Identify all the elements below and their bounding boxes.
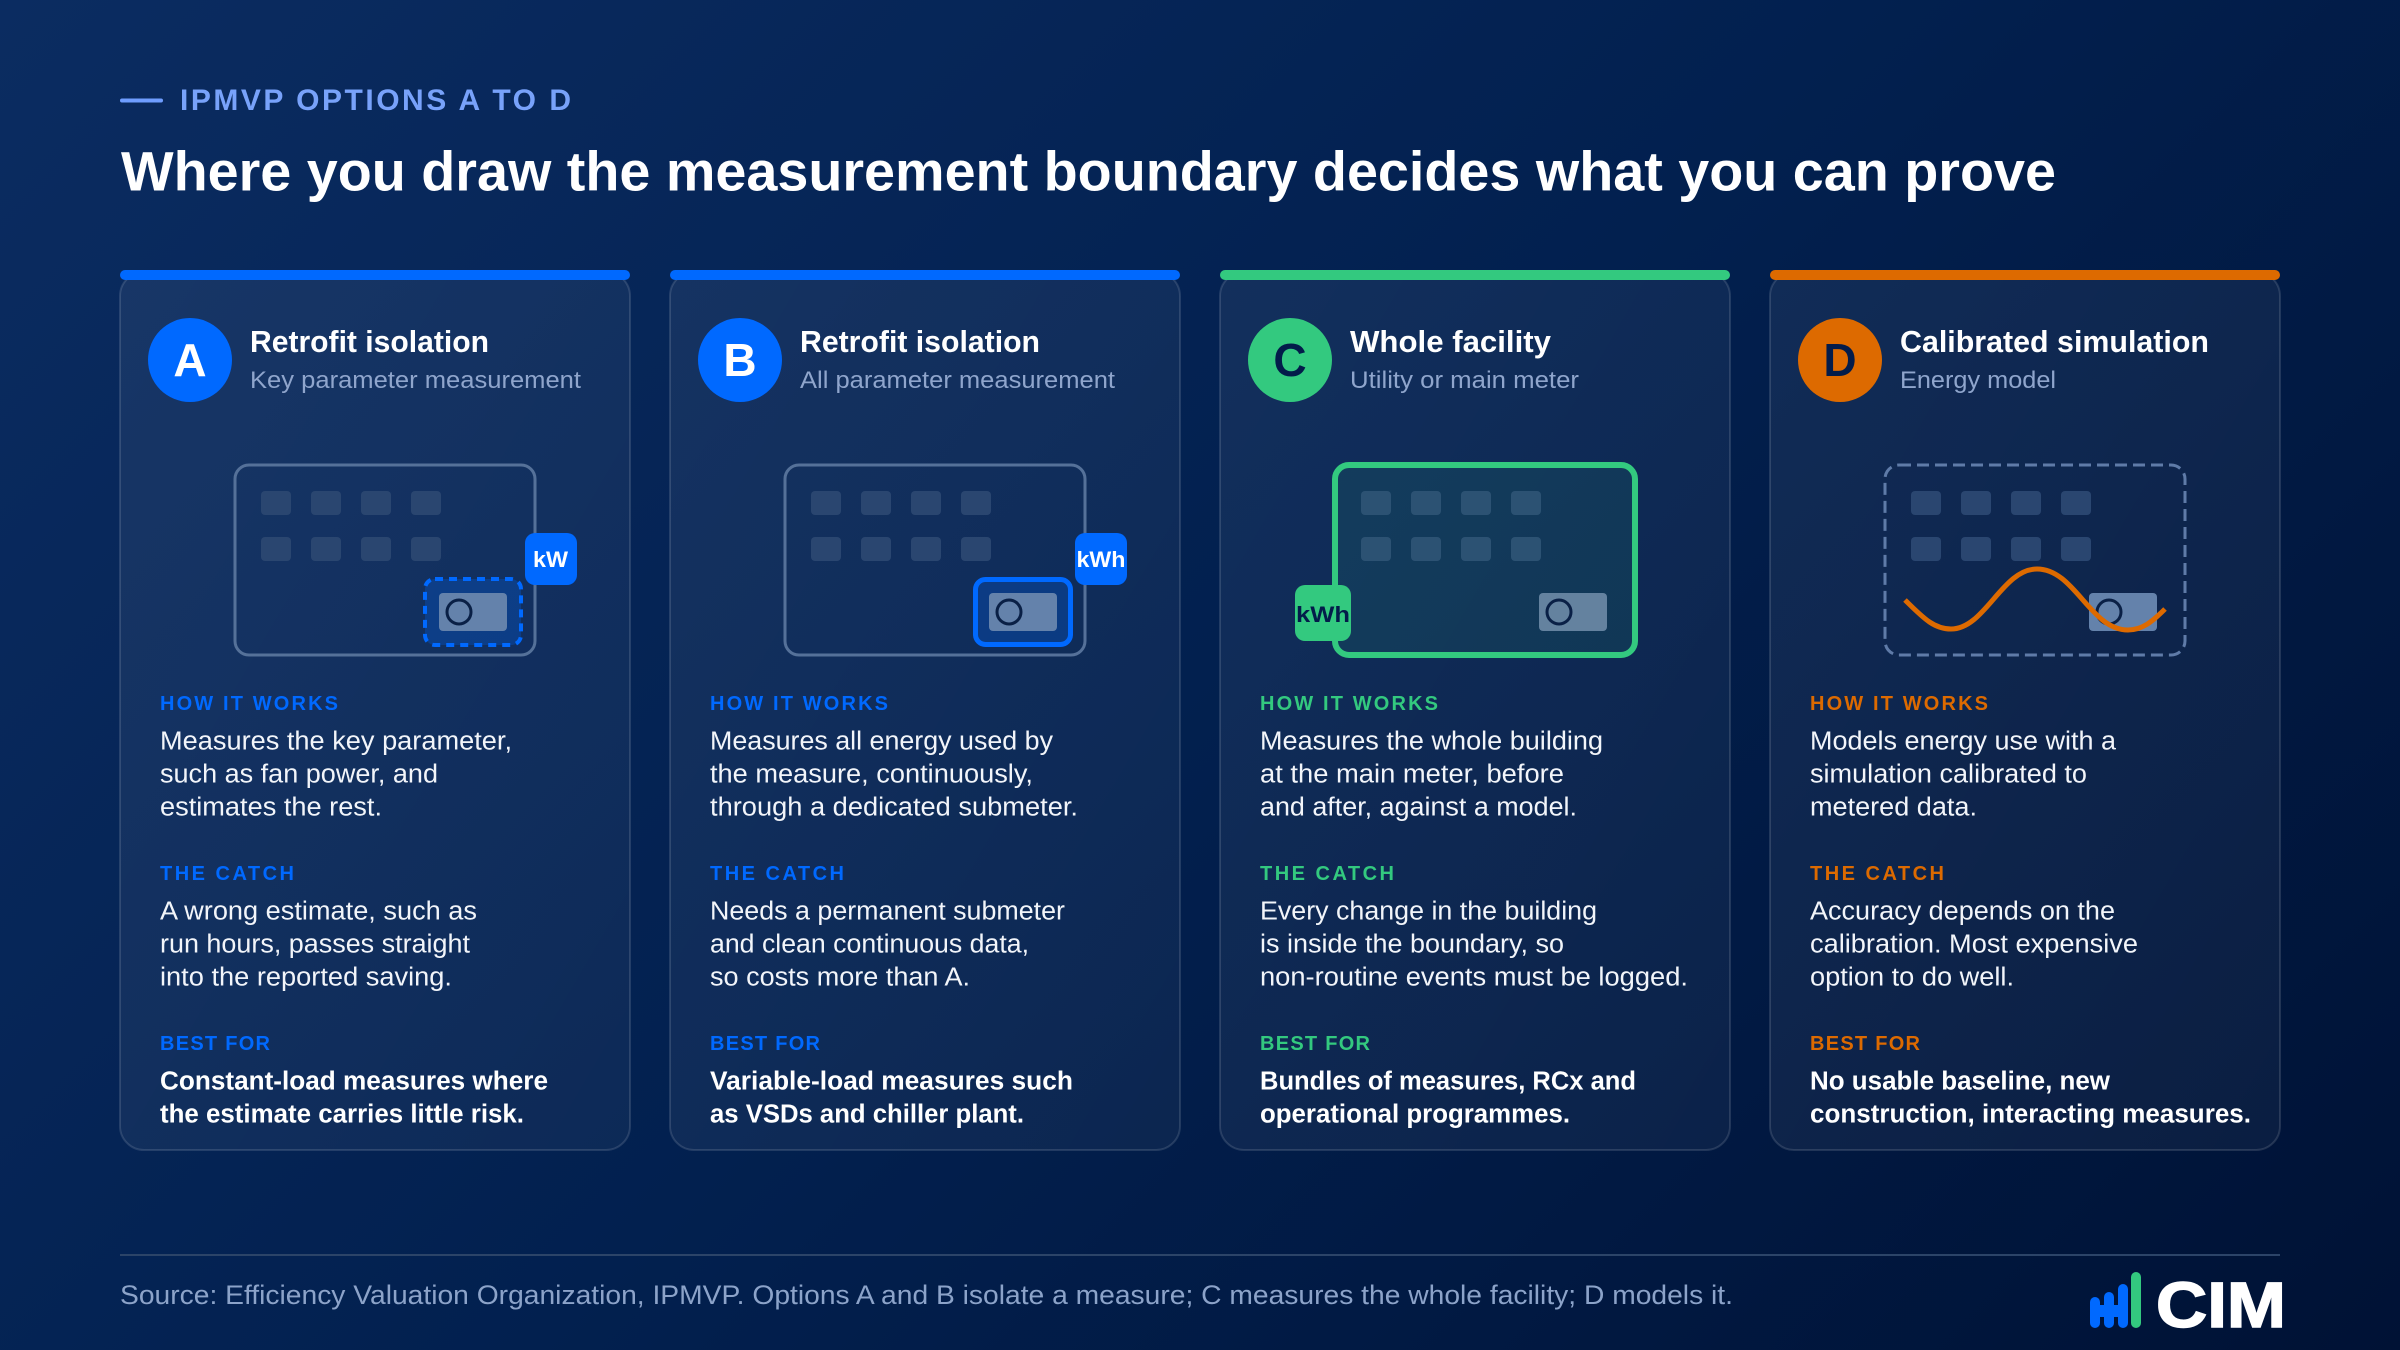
source note: Source: Efficiency Valuation Organization, IPMVP. Options A and B isolate a measure; C measures the whole facility; D models it. <box>120 1280 1733 1310</box>
panel: option C <box>1220 270 1730 1150</box>
the catch A: run hours, passes straight <box>160 930 470 958</box>
how it works C: and after, against a model. <box>1260 794 1577 822</box>
the catch A <box>160 863 477 992</box>
badge B: B <box>723 334 757 386</box>
diagram A: retrofit isolation with kW meter: kW <box>533 547 568 572</box>
badge A: A <box>173 334 207 386</box>
best for C: BEST FOR <box>1260 1033 1371 1055</box>
the catch B <box>710 863 1066 992</box>
the catch D: Accuracy depends on the <box>1810 898 2115 926</box>
panel: option B <box>670 270 1180 1150</box>
how it works C: at the main meter, before <box>1260 760 1564 788</box>
heading A: Key parameter measurement <box>250 367 581 394</box>
the catch D <box>1810 863 2138 992</box>
how it works C <box>1260 693 1603 822</box>
eyebrow: IPMVP OPTIONS A TO D <box>180 84 571 117</box>
how it works B: Measures all energy used by <box>710 728 1053 756</box>
badge A <box>148 318 232 402</box>
best for B: as VSDs and chiller plant. <box>710 1100 1024 1128</box>
panel: option A <box>120 270 630 1150</box>
how it works D: metered data. <box>1810 794 1977 822</box>
heading D <box>1900 324 2209 394</box>
diagram D: modelled building with simulation curve <box>1885 465 2185 655</box>
the catch B: and clean continuous data, <box>710 930 1029 958</box>
the catch C: THE CATCH <box>1260 863 1394 885</box>
how it works A: HOW IT WORKS <box>160 693 338 715</box>
the catch A: into the reported saving. <box>160 964 452 992</box>
heading A: Retrofit isolation <box>250 324 489 359</box>
the catch A: A wrong estimate, such as <box>160 898 477 926</box>
best for B: Variable-load measures such <box>710 1068 1073 1096</box>
best for A: Constant-load measures where <box>160 1068 548 1096</box>
the catch C: non-routine events must be logged. <box>1260 964 1688 992</box>
best for B <box>710 1033 1073 1128</box>
heading D: Calibrated simulation <box>1900 324 2209 359</box>
the catch B: so costs more than A. <box>710 964 970 992</box>
badge D: D <box>1823 334 1857 386</box>
the catch B: Needs a permanent submeter <box>710 898 1066 926</box>
heading C: Whole facility <box>1350 324 1552 359</box>
diagram B: retrofit isolation with kWh submeter <box>785 465 1127 655</box>
the catch B: THE CATCH <box>710 863 844 885</box>
heading B: Retrofit isolation <box>800 324 1040 359</box>
accent bar B <box>670 270 1180 280</box>
how it works D: HOW IT WORKS <box>1810 693 1988 715</box>
best for C <box>1260 1033 1636 1128</box>
best for A: the estimate carries little risk. <box>160 1100 524 1128</box>
how it works D <box>1810 693 2117 822</box>
how it works A <box>160 693 512 822</box>
best for B: BEST FOR <box>710 1033 821 1055</box>
how it works B: HOW IT WORKS <box>710 693 888 715</box>
best for C: Bundles of measures, RCx and <box>1260 1068 1636 1096</box>
accent bar A <box>120 270 630 280</box>
how it works C: Measures the whole building <box>1260 728 1603 756</box>
heading C <box>1350 324 1579 394</box>
best for D: construction, interacting measures. <box>1810 1100 2251 1128</box>
heading B: All parameter measurement <box>800 367 1115 394</box>
how it works D: simulation calibrated to <box>1810 760 2087 788</box>
how it works B: through a dedicated submeter. <box>710 794 1078 822</box>
best for A <box>160 1033 548 1128</box>
the catch C <box>1260 863 1688 992</box>
best for A: BEST FOR <box>160 1033 271 1055</box>
heading A <box>250 324 581 394</box>
badge B <box>698 318 782 402</box>
how it works B: the measure, continuously, <box>710 760 1033 788</box>
diagram C: whole building boundary with main meter: kWh <box>1296 602 1350 627</box>
how it works A: such as fan power, and <box>160 760 438 788</box>
heading D: Energy model <box>1900 367 2056 394</box>
best for D: BEST FOR <box>1810 1033 1921 1055</box>
logo: CIM <box>2090 1269 2286 1341</box>
diagram A: retrofit isolation with kW meter <box>235 465 577 655</box>
how it works A: Measures the key parameter, <box>160 728 512 756</box>
diagram B: retrofit isolation with kWh submeter: kWh <box>1076 547 1126 572</box>
best for C: operational programmes. <box>1260 1100 1570 1128</box>
title: Where you draw the measurement boundary decides what you can prove <box>121 140 2056 202</box>
how it works C: HOW IT WORKS <box>1260 693 1438 715</box>
badge C <box>1248 318 1332 402</box>
accent bar C <box>1220 270 1730 280</box>
accent bar D <box>1770 270 2280 280</box>
the catch D: option to do well. <box>1810 964 2014 992</box>
the catch D: calibration. Most expensive <box>1810 930 2138 958</box>
heading C: Utility or main meter <box>1350 367 1579 394</box>
the catch A: THE CATCH <box>160 863 294 885</box>
best for D <box>1810 1033 2251 1128</box>
the catch C: Every change in the building <box>1260 898 1597 926</box>
heading B <box>800 324 1115 394</box>
badge C: C <box>1273 334 1307 386</box>
how it works D: Models energy use with a <box>1810 728 2117 756</box>
the catch C: is inside the boundary, so <box>1260 930 1564 958</box>
how it works A: estimates the rest. <box>160 794 382 822</box>
badge D <box>1798 318 1882 402</box>
diagram C: whole building boundary with main meter <box>1295 465 1635 655</box>
panel: option D <box>1770 270 2280 1150</box>
how it works B <box>710 693 1078 822</box>
the catch D: THE CATCH <box>1810 863 1944 885</box>
logo: CIM: CIM <box>2156 1269 2286 1341</box>
best for D: No usable baseline, new <box>1810 1068 2110 1096</box>
